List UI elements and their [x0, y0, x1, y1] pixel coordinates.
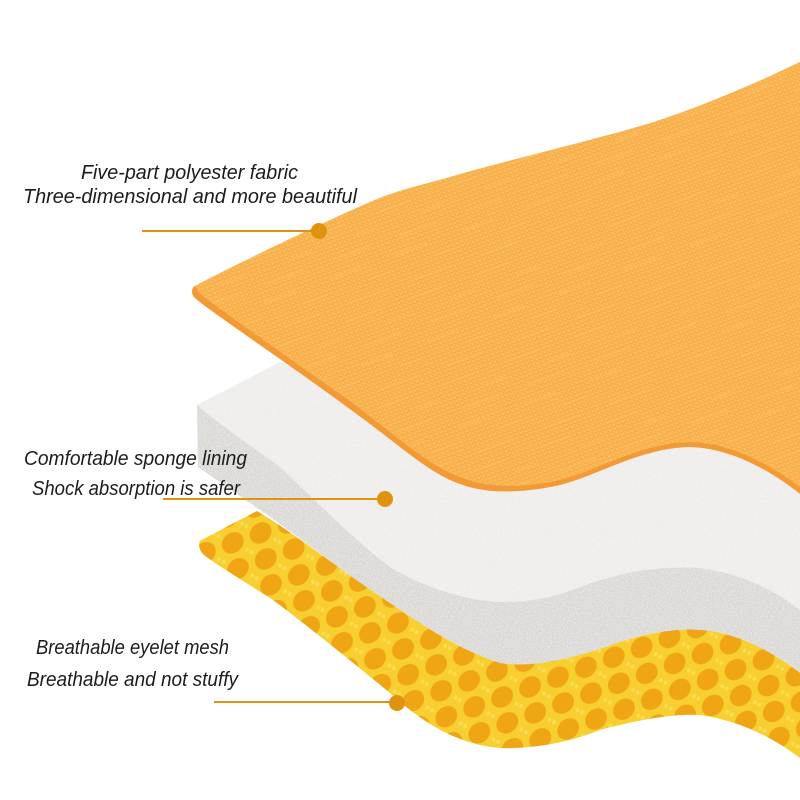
fabric dot: [311, 223, 327, 239]
sponge leader line: [163, 498, 385, 500]
callout: fabric: [23, 162, 358, 239]
mesh text: Breathable and not stuffy: [27, 669, 239, 691]
sponge text: Comfortable sponge lining: [24, 448, 247, 470]
mesh text: Breathable eyelet mesh: [36, 637, 229, 659]
layer: yellow eyelet mesh: [199, 511, 800, 758]
layer: orange polyester fabric: [192, 62, 800, 494]
fabric leader line: [142, 230, 319, 232]
sponge dot: [377, 491, 393, 507]
mesh text: [27, 637, 239, 691]
sponge text: [24, 448, 247, 500]
sponge text: Shock absorption is safer: [32, 478, 241, 500]
layer: grey foam side: [197, 405, 800, 673]
layer: white foam top: [197, 362, 800, 610]
fabric text: Five-part polyester fabric: [81, 162, 298, 184]
fabric text: [23, 162, 358, 208]
mesh dot: [389, 695, 405, 711]
fabric text: Three-dimensional and more beautiful: [23, 186, 358, 208]
mesh leader line: [214, 701, 397, 703]
callout: mesh: [27, 637, 405, 711]
callout: sponge: [24, 448, 393, 507]
